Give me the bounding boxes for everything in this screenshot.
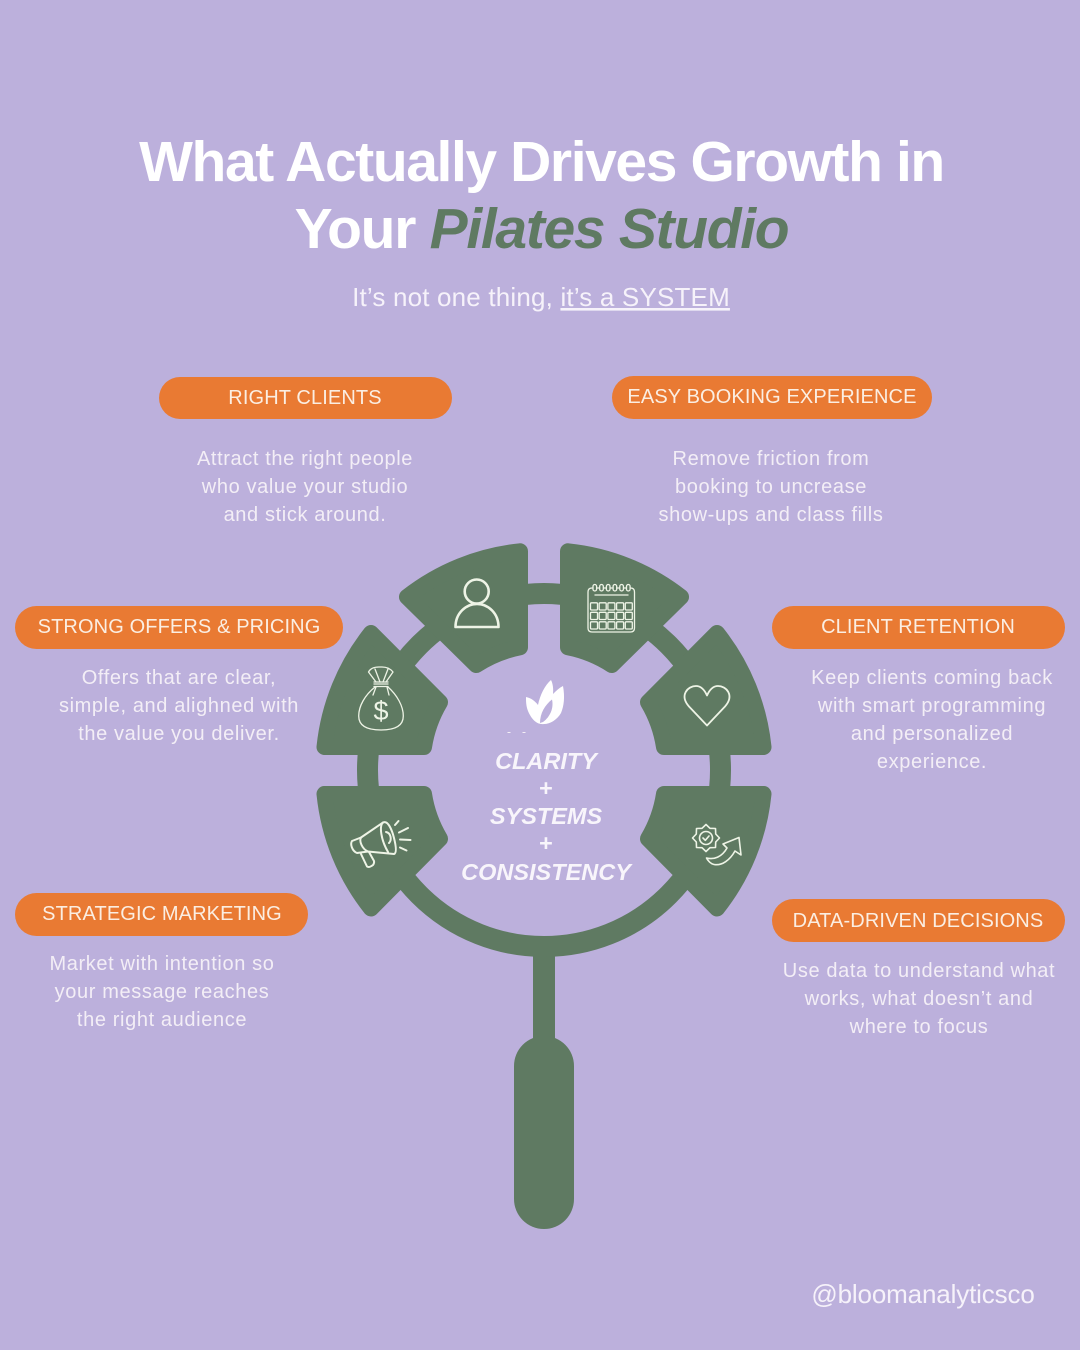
text: easy booking: show-ups and class fills — [659, 504, 883, 526]
title: What Actually Drives Growth in — [139, 130, 944, 194]
pill: strategic marketing: STRATEGIC MARKETING — [42, 903, 282, 925]
subtitle: It’s not one thing, it’s a SYSTEM — [352, 282, 730, 312]
text: strong offers: Offers that are clear, — [82, 667, 276, 689]
icon: money bag — [359, 667, 403, 730]
center text: + — [539, 775, 553, 801]
pill: data-driven decisions: DATA-DRIVEN DECISIONS — [793, 910, 1043, 932]
icon: calendar — [588, 584, 634, 632]
panel: strategic marketing — [15, 893, 308, 1031]
panel: easy booking — [612, 376, 932, 526]
text: right clients: who value your studio — [201, 476, 408, 498]
segment: right clients — [407, 551, 520, 665]
panel: client retention — [772, 606, 1065, 773]
pill: right clients: RIGHT CLIENTS — [228, 387, 382, 409]
segment: data — [648, 794, 764, 908]
text: client retention — [811, 667, 1053, 773]
icon: money bag: $ — [373, 696, 389, 726]
text: strategic marketing — [50, 953, 274, 1031]
text: right clients: and stick around. — [224, 504, 386, 526]
panel: right clients — [159, 377, 452, 526]
center text: SYSTEMS — [490, 803, 602, 829]
text: client retention: experience. — [877, 751, 987, 773]
center logo — [508, 680, 564, 732]
panel: data-driven decisions — [772, 899, 1065, 1038]
title — [139, 130, 944, 261]
text: easy booking: booking to uncrease — [675, 476, 867, 498]
text: easy booking — [659, 448, 883, 526]
text: strong offers — [59, 667, 299, 745]
text: strategic marketing: Market with intention so — [50, 953, 274, 975]
segment: retention — [648, 633, 764, 747]
text: right clients: Attract the right people — [197, 448, 413, 470]
text: data-driven decisions: Use data to understand what — [783, 960, 1055, 982]
icon: heart — [685, 686, 729, 726]
text: data-driven decisions: works, what doesn’t and — [804, 988, 1033, 1010]
icon: gear with growth arrow — [692, 824, 741, 865]
text: strong offers: the value you deliver. — [78, 723, 280, 745]
segment: booking — [568, 551, 681, 665]
center text: CLARITY — [495, 748, 599, 774]
text: client retention: and personalized — [851, 723, 1013, 745]
ring — [368, 594, 720, 946]
pill: strong offers: STRONG OFFERS & PRICING — [38, 616, 320, 638]
text: strategic marketing: the right audience — [77, 1009, 247, 1031]
center text: CONSISTENCY — [461, 859, 633, 885]
panel: strong offers — [15, 606, 343, 745]
text: right clients — [197, 448, 413, 526]
magnifying glass diagram — [324, 551, 764, 1229]
text: client retention: Keep clients coming back — [811, 667, 1053, 689]
segment: offers — [324, 633, 440, 747]
title: Your Pilates Studio — [295, 197, 788, 261]
handle credit: @bloomanalyticsco — [811, 1279, 1035, 1309]
text: client retention: with smart programming — [817, 695, 1046, 717]
text: strategic marketing: your message reaches — [55, 981, 269, 1003]
icon: megaphone — [351, 821, 410, 867]
pill: strong offers — [15, 606, 343, 649]
text: data-driven decisions — [783, 960, 1055, 1038]
pill: right clients — [159, 377, 452, 419]
pill: client retention: CLIENT RETENTION — [821, 616, 1015, 638]
text: strong offers: simple, and alighned with — [59, 695, 299, 717]
segment: marketing — [324, 794, 440, 908]
pill: easy booking — [612, 376, 932, 419]
pill: strategic marketing — [15, 893, 308, 936]
pill: data-driven decisions — [772, 899, 1065, 942]
pill: easy booking: EASY BOOKING EXPERIENCE — [627, 386, 917, 408]
icon: person — [456, 580, 498, 627]
text: easy booking: Remove friction from — [673, 448, 869, 470]
pill: client retention — [772, 606, 1065, 649]
center text: + — [539, 830, 553, 856]
text: data-driven decisions: where to focus — [849, 1016, 988, 1038]
center text — [461, 748, 633, 885]
handle — [514, 950, 574, 1229]
